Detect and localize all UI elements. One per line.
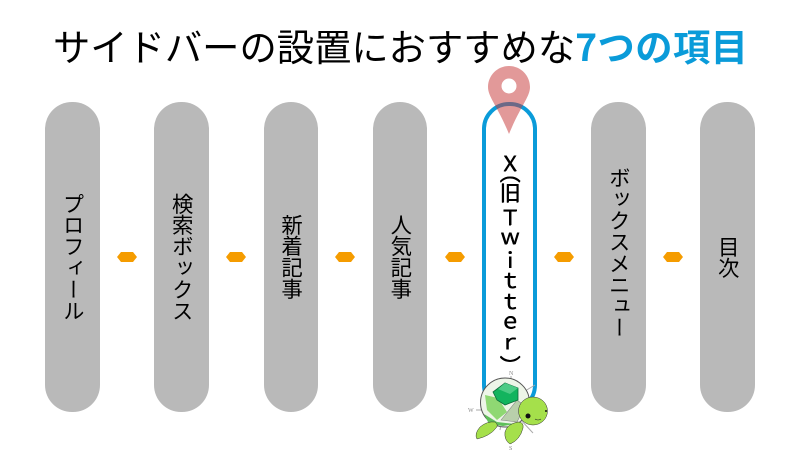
arrow: connector 5 [554, 252, 574, 262]
arrow: connector 4 [445, 252, 465, 262]
panel: 人気記事: 人気記事 [388, 214, 412, 300]
panel: 新着記事: 新着記事 [279, 214, 303, 300]
icon: turtle mascot with compass: N [509, 371, 514, 377]
panel: 新着記事 [264, 102, 318, 412]
title: サイドバーの設置におすすめな7つの項目 [53, 18, 748, 72]
panel: X (highlighted) [482, 102, 537, 412]
arrow: connector 6 [663, 252, 683, 262]
panel: X (highlighted): Ｘ（ 旧 Ｔｗｉｔｔｅｒ ） [495, 152, 525, 376]
arrow: connector 1 [117, 252, 137, 262]
panel: 人気記事 [373, 102, 427, 412]
panel: 検索ボックス: 検索ボックス [169, 193, 193, 321]
arrow: connector 2 [226, 252, 246, 262]
panel: 目次: 目次 [715, 236, 739, 278]
icon: map pin [488, 66, 530, 134]
panel: プロフィール: プロフィール [60, 193, 84, 321]
panel: プロフィール [45, 102, 100, 412]
panel: ボックスメニュー [591, 102, 646, 412]
panel: 検索ボックス [154, 102, 209, 412]
icon: turtle mascot with compass [468, 371, 548, 450]
panel: ボックスメニュー: ボックスメニュー [606, 167, 630, 339]
icon: turtle mascot with compass: W [468, 408, 474, 414]
panel: 目次 [700, 102, 755, 412]
arrow: connector 3 [335, 252, 355, 262]
